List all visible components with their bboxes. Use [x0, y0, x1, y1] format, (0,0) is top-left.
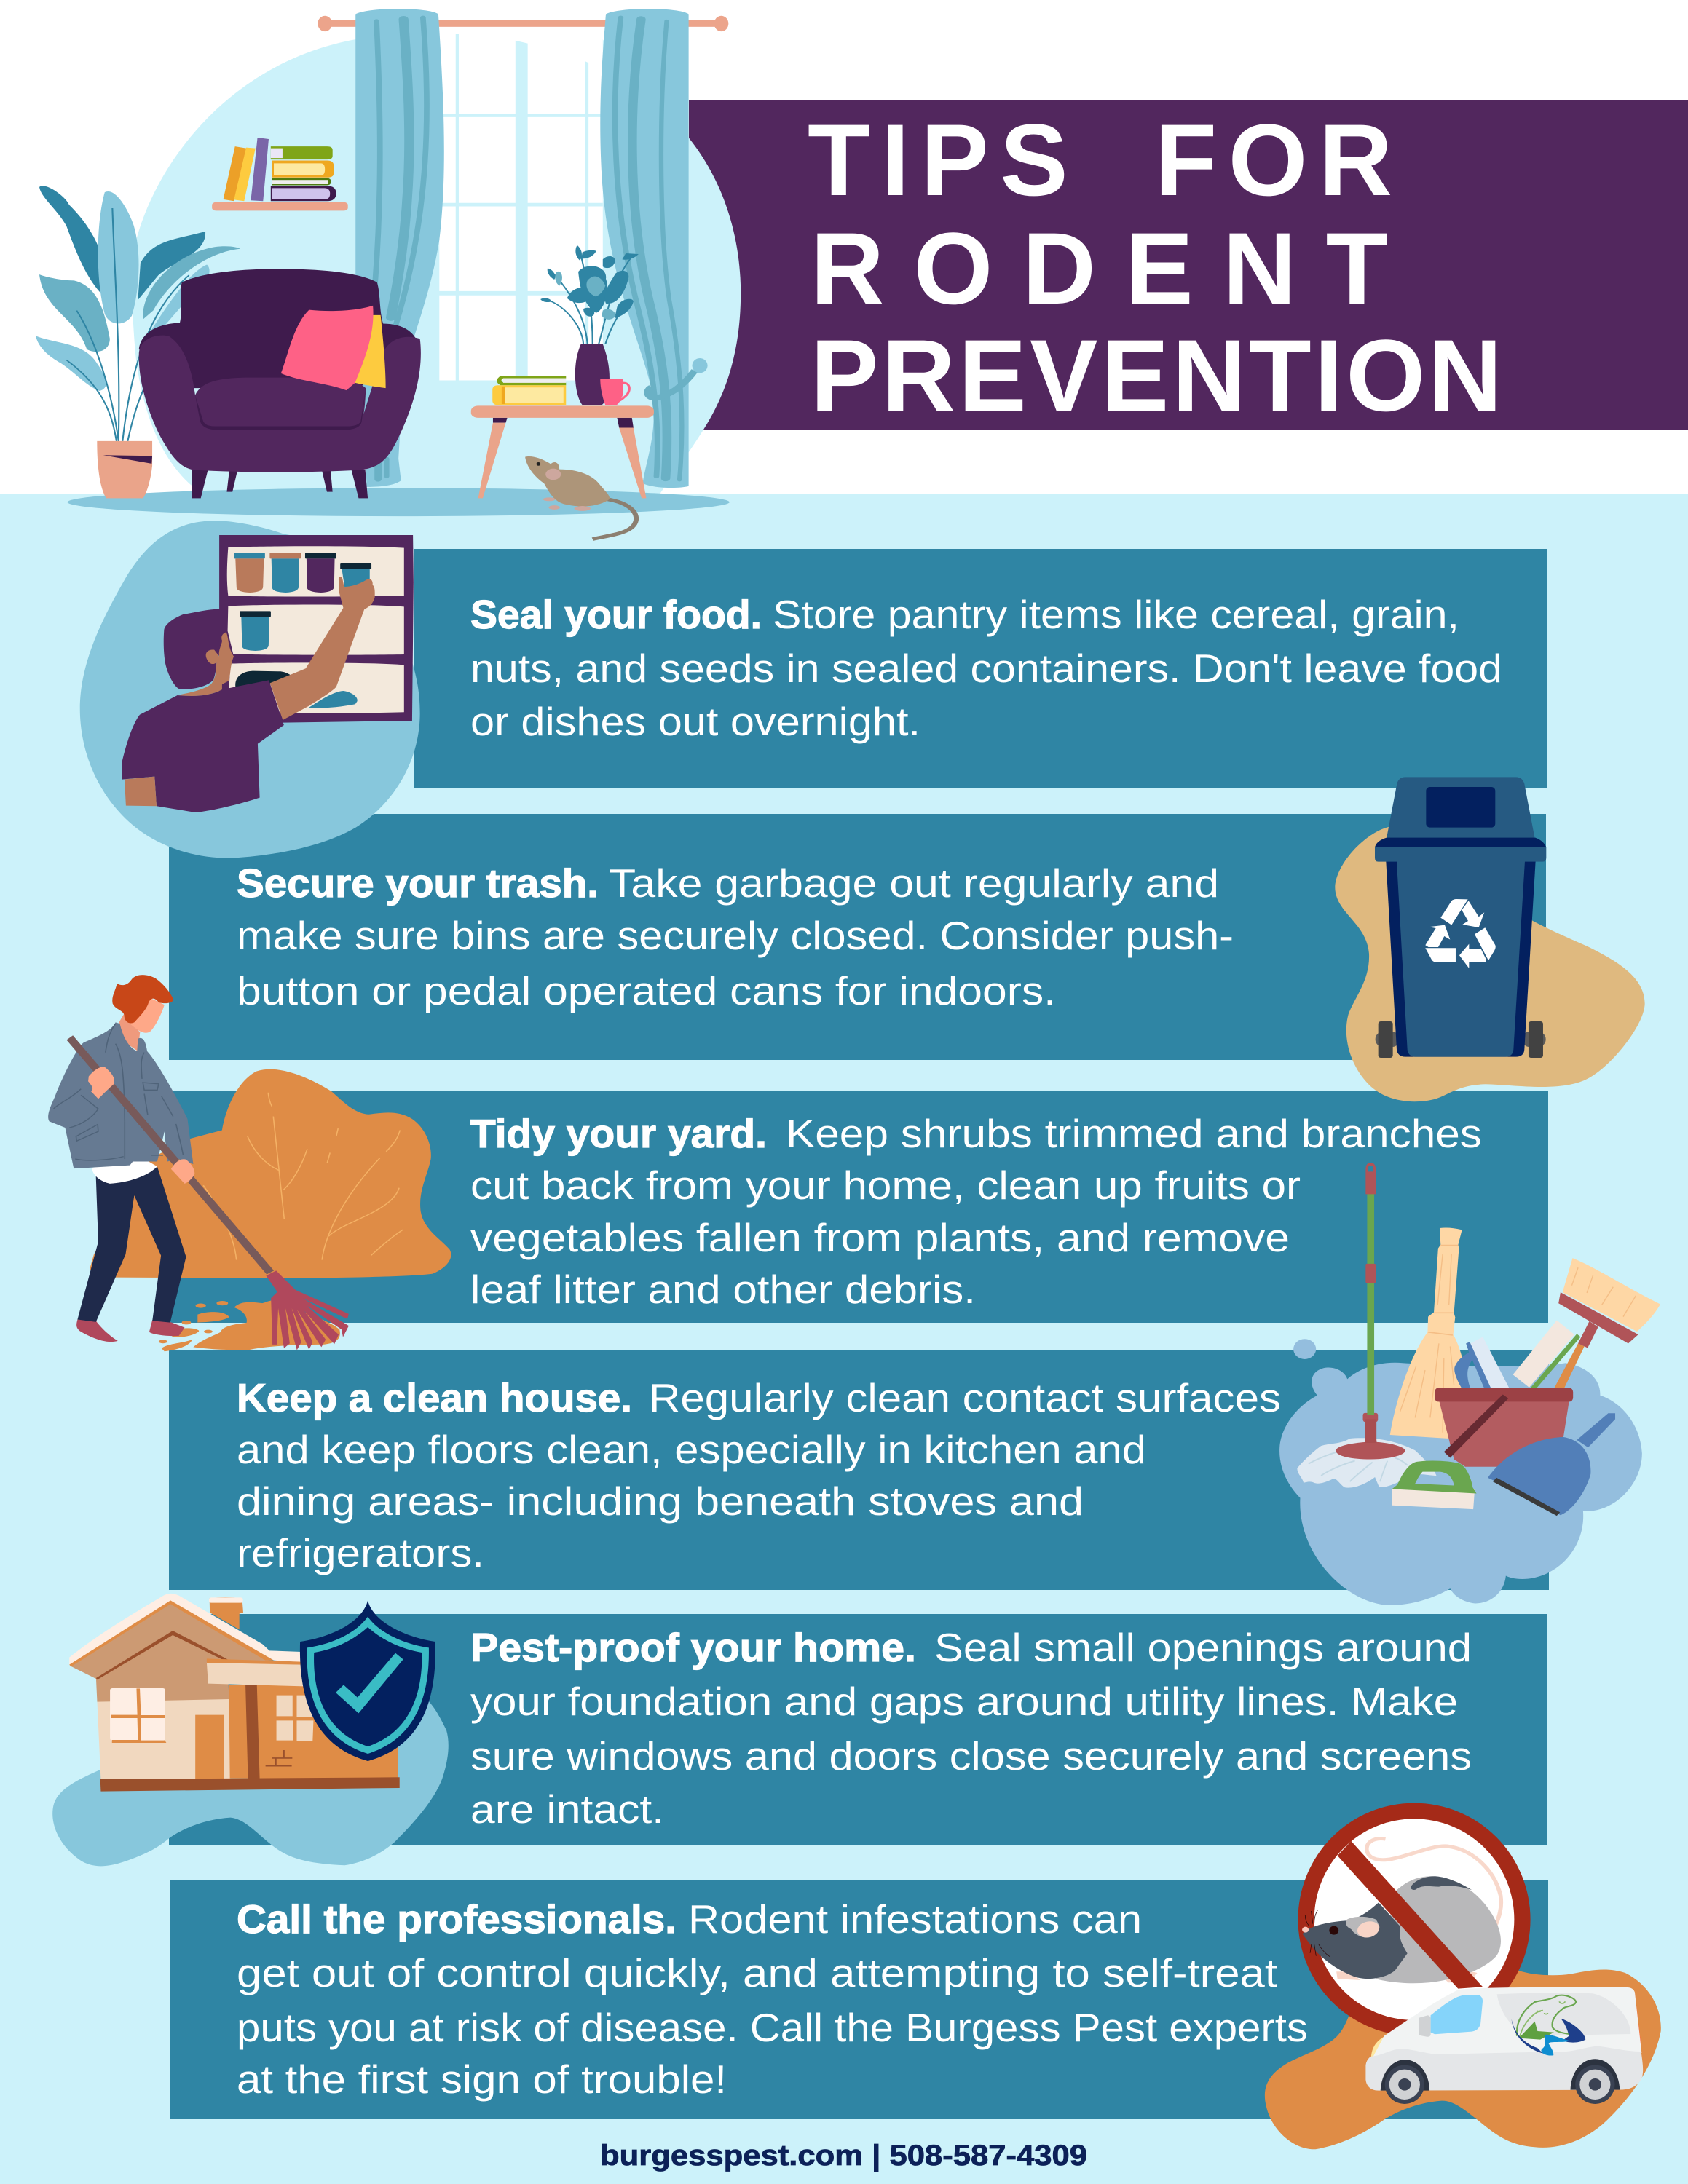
vase	[575, 344, 610, 405]
text: call the professionals: get out of control quickly, and attempting to self-treat	[237, 1950, 1277, 1995]
blob	[1335, 827, 1645, 1101]
text: tidy your yard: Tidy your yard.	[470, 1111, 767, 1156]
text: seal your food: Seal your food.	[470, 592, 762, 637]
text: pest-proof your home: Pest-proof your home.	[470, 1625, 916, 1670]
title text: PREVENTION	[811, 318, 1505, 432]
vase plant	[540, 245, 639, 405]
wall shelf with books	[212, 138, 348, 210]
bucket	[1435, 1388, 1573, 1467]
rat head	[1302, 1902, 1408, 1979]
panel: call the professionals	[170, 1880, 1548, 2119]
rat ear	[1346, 1917, 1379, 1937]
text: keep a clean house: refrigerators.	[237, 1530, 484, 1575]
panel: pest-proof your home	[169, 1614, 1547, 1845]
text: call the professionals	[237, 1896, 1308, 2102]
bin body	[1386, 861, 1536, 1057]
curtain rod	[318, 16, 728, 31]
shoes	[76, 1319, 185, 1342]
armchair	[139, 269, 421, 498]
text: pest-proof your home	[470, 1625, 1472, 1832]
pantry shelf	[219, 535, 414, 723]
recycling symbol	[1425, 899, 1496, 968]
hands	[88, 1067, 194, 1184]
pink mug	[600, 379, 629, 405]
window	[419, 21, 603, 381]
panel: seal your food	[414, 549, 1547, 788]
van	[1365, 1987, 1643, 2104]
prohibition sign with rat	[1298, 1803, 1531, 2036]
dustpan	[1488, 1413, 1615, 1516]
leaf pile	[159, 1300, 340, 1351]
text: call the professionals: puts you at risk of disease. Call the Burgess Pest experts	[237, 2005, 1308, 2050]
floor plant	[36, 186, 240, 498]
hair	[112, 975, 173, 1023]
illustration: person at pantry shelf	[80, 521, 420, 858]
text: keep a clean house: and keep floors clean, especially in kitchen and	[237, 1427, 1146, 1472]
illustration: no-rat sign and van	[1265, 1803, 1661, 2149]
denim jacket	[48, 1022, 193, 1168]
soap blob	[1279, 1339, 1642, 1605]
person	[122, 577, 375, 812]
text: pest-proof your home: sure windows and doors close securely and screens	[470, 1733, 1472, 1779]
text: call the professionals: at the first sign of trouble!	[237, 2057, 727, 2102]
side table	[471, 405, 654, 498]
shield	[300, 1600, 435, 1761]
text: keep a clean house: Keep a clean house.	[237, 1375, 632, 1420]
footer contact line: burgesspest.com | 508-587-4309	[600, 2140, 1087, 2172]
hand broom	[1390, 1227, 1472, 1440]
text: pest-proof your home: your foundation and gaps around utility lines. Make	[470, 1679, 1458, 1724]
rat tail	[1367, 1838, 1501, 1927]
text: tidy your yard	[470, 1111, 1482, 1312]
text: secure your trash: button or pedal operated cans for indoors.	[237, 968, 1056, 1013]
text: seal your food: Store pantry items like cereal, grain,	[773, 592, 1459, 637]
text: secure your trash	[237, 860, 1234, 1013]
wall dome	[132, 39, 741, 495]
text: secure your trash: Take garbage out regularly and	[609, 860, 1219, 906]
neck	[119, 1013, 140, 1051]
mop	[1297, 1163, 1436, 1488]
white brush	[1513, 1320, 1574, 1388]
rat body	[1376, 1876, 1501, 1983]
plant pot	[97, 441, 152, 498]
left curtain	[355, 9, 444, 487]
illustration: cleaning supplies	[1279, 1163, 1660, 1605]
text: seal your food	[470, 592, 1502, 744]
text: tidy your yard: cut back from your home, clean up fruits or	[470, 1163, 1301, 1208]
trousers	[77, 1166, 186, 1323]
frog logo	[1512, 1995, 1585, 2056]
text: tidy your yard: leaf litter and other debris.	[470, 1267, 976, 1312]
house	[69, 1594, 400, 1792]
blob	[80, 521, 420, 858]
bush	[90, 1069, 451, 1278]
text: keep a clean house: Regularly clean contact surfaces	[649, 1375, 1281, 1420]
text: seal your food: nuts, and seeds in sealed containers. Don't leave food	[470, 646, 1502, 691]
title text	[808, 103, 1505, 432]
illustration: living room scene	[36, 9, 741, 539]
illustration: recycling bin	[1335, 777, 1645, 1101]
panel: keep a clean house	[169, 1350, 1549, 1590]
blob	[1265, 1970, 1661, 2149]
panel: tidy your yard	[169, 1091, 1548, 1323]
text: call the professionals: Rodent infestations can	[688, 1896, 1142, 1942]
text: pest-proof your home: are intact.	[470, 1787, 664, 1832]
illustration: man raking leaves	[48, 975, 451, 1351]
table books	[492, 376, 566, 405]
face	[130, 999, 165, 1033]
bin lid	[1375, 777, 1546, 862]
text: call the professionals: Call the professionals.	[237, 1896, 677, 1942]
cushion pink	[281, 306, 374, 390]
text: seal your food: or dishes out overnight.	[470, 699, 920, 744]
text: tidy your yard: Keep shrubs trimmed and branches	[786, 1111, 1482, 1156]
blue scrub brush	[1470, 1337, 1509, 1388]
rat feet	[1336, 1971, 1478, 1982]
title text: TIPS FOR	[808, 103, 1404, 217]
cushion yellow	[355, 315, 386, 388]
van wheels	[1381, 2059, 1620, 2104]
title banner	[689, 100, 1688, 432]
sign bar	[1338, 1841, 1483, 1989]
text: keep a clean house: dining areas- including beneath stoves and	[237, 1479, 1084, 1524]
green scrub brush	[1392, 1461, 1477, 1509]
t-shirt	[92, 1058, 157, 1184]
panel: secure your trash	[169, 814, 1546, 1060]
right curtain	[600, 9, 689, 488]
title text: RODENT	[811, 211, 1418, 325]
van window	[1431, 1995, 1483, 2034]
mouse	[525, 456, 636, 539]
text: pest-proof your home: Seal small openings around	[934, 1625, 1472, 1670]
curtain tieback	[648, 358, 708, 398]
rug	[68, 488, 730, 516]
blob	[52, 1698, 449, 1866]
text: tidy your yard: vegetables fallen from plants, and remove	[470, 1215, 1290, 1260]
wheels	[1376, 1021, 1546, 1058]
illustration: house and shield	[52, 1594, 449, 1866]
rake	[66, 1035, 349, 1350]
red floor brush	[1554, 1343, 1585, 1388]
text: secure your trash: make sure bins are securely closed. Consider push-	[237, 913, 1234, 958]
text: secure your trash: Secure your trash.	[237, 860, 599, 906]
jars	[234, 553, 371, 708]
text: keep a clean house	[237, 1375, 1281, 1575]
brooms and brushes behind bucket	[1390, 1227, 1660, 1440]
